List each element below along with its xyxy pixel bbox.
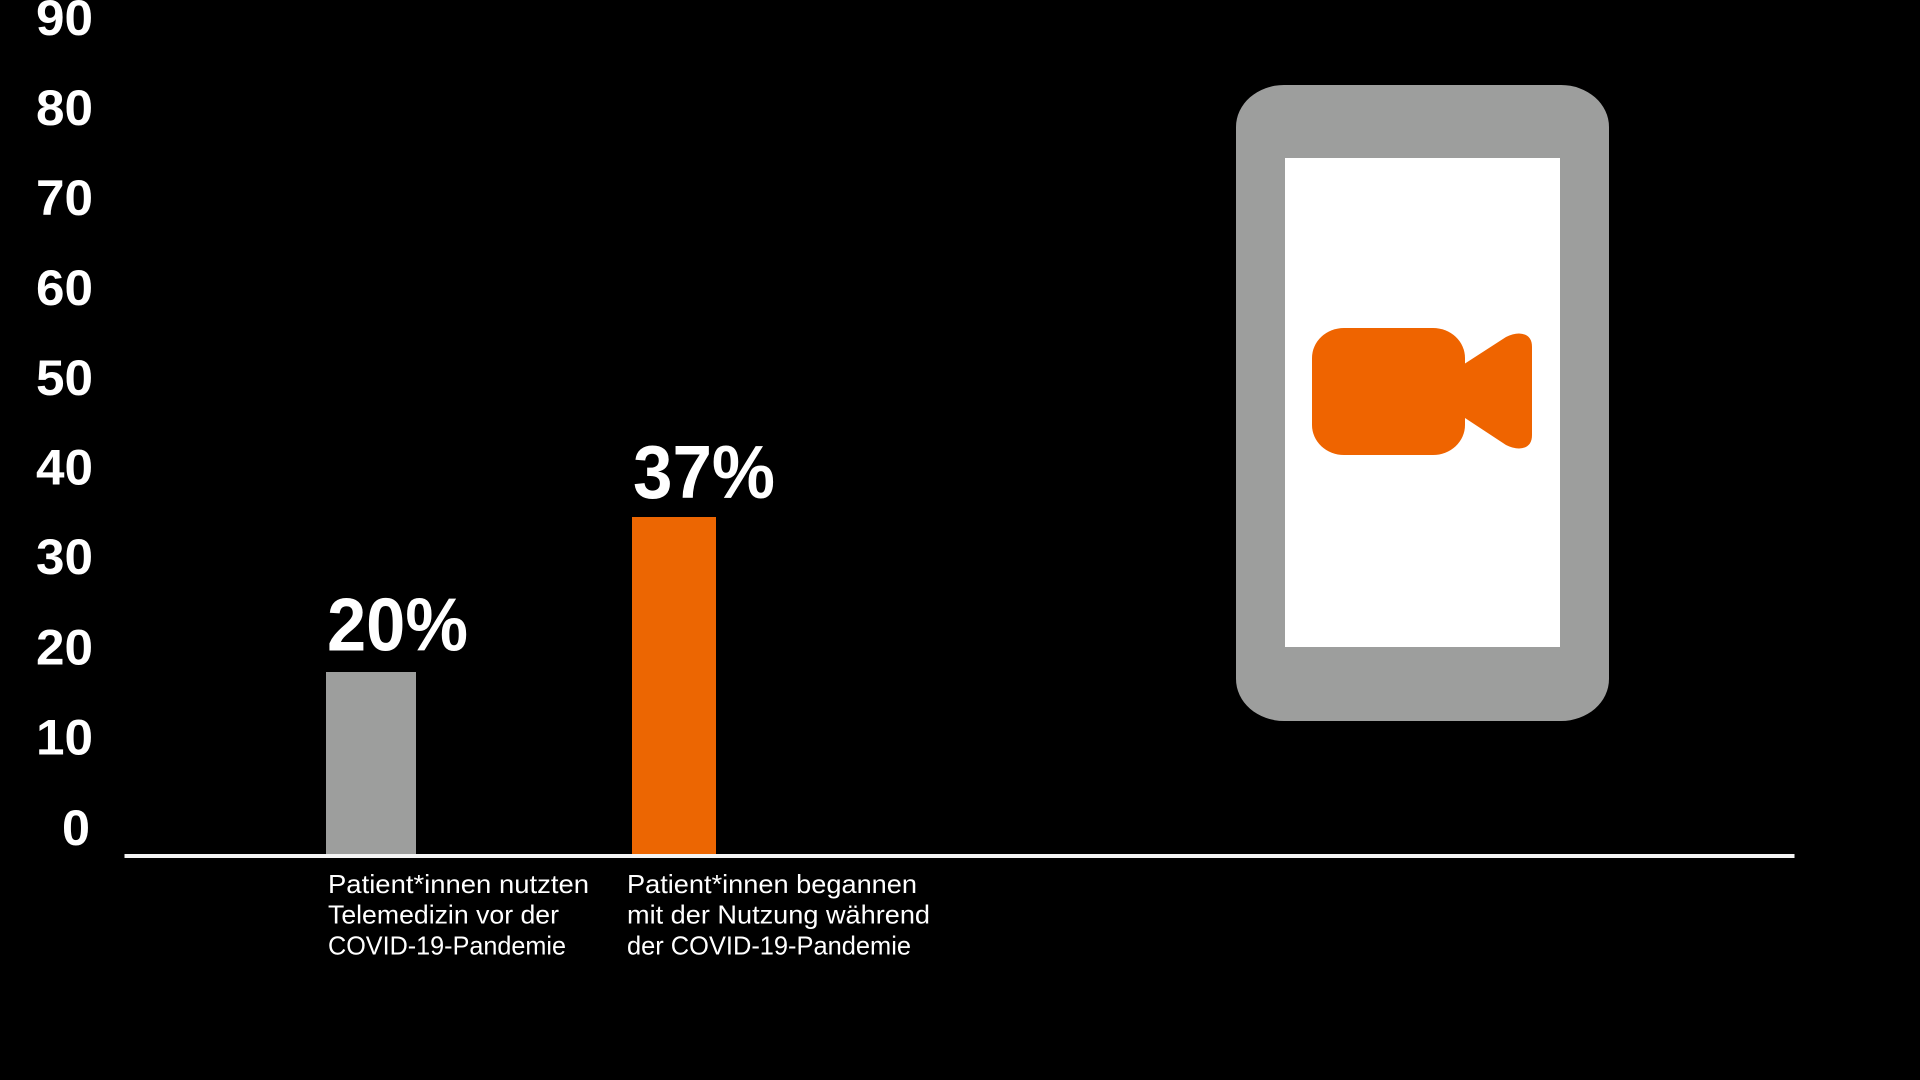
bar: during pandemic 37%: [632, 517, 716, 855]
caption: during pandemic: Patient*innen begannen: [627, 871, 917, 899]
phone screen: [1285, 158, 1560, 647]
y axis labels: 40: [36, 440, 93, 496]
phone body: [1236, 85, 1609, 721]
bar: before pandemic 20%: [326, 672, 416, 855]
caption: before pandemic: [328, 871, 589, 960]
caption: during pandemic: der COVID-19-Pandemie: [627, 932, 911, 960]
y axis labels: 50: [36, 350, 93, 406]
value label: 37%: 37%: [633, 430, 775, 514]
icon: video camera: [1312, 328, 1532, 455]
y axis labels: 80: [36, 80, 93, 136]
y axis labels: [36, 0, 93, 856]
y axis labels: 20: [36, 620, 93, 676]
y axis labels: 10: [36, 710, 93, 766]
y axis labels: 70: [36, 170, 93, 226]
y axis labels: 30: [36, 529, 93, 585]
value label: 20%: 20%: [327, 582, 468, 666]
x axis line: [124, 854, 1794, 858]
caption: before pandemic: Telemedizin vor der: [328, 902, 559, 930]
y axis labels: 0: [62, 800, 90, 856]
caption: during pandemic: mit der Nutzung während: [627, 902, 930, 930]
y axis labels: 60: [36, 260, 93, 316]
icon: smartphone with video camera: [1236, 85, 1609, 721]
caption: during pandemic: [627, 871, 930, 960]
caption: before pandemic: Patient*innen nutzten: [328, 871, 589, 899]
caption: before pandemic: COVID-19-Pandemie: [328, 932, 566, 960]
